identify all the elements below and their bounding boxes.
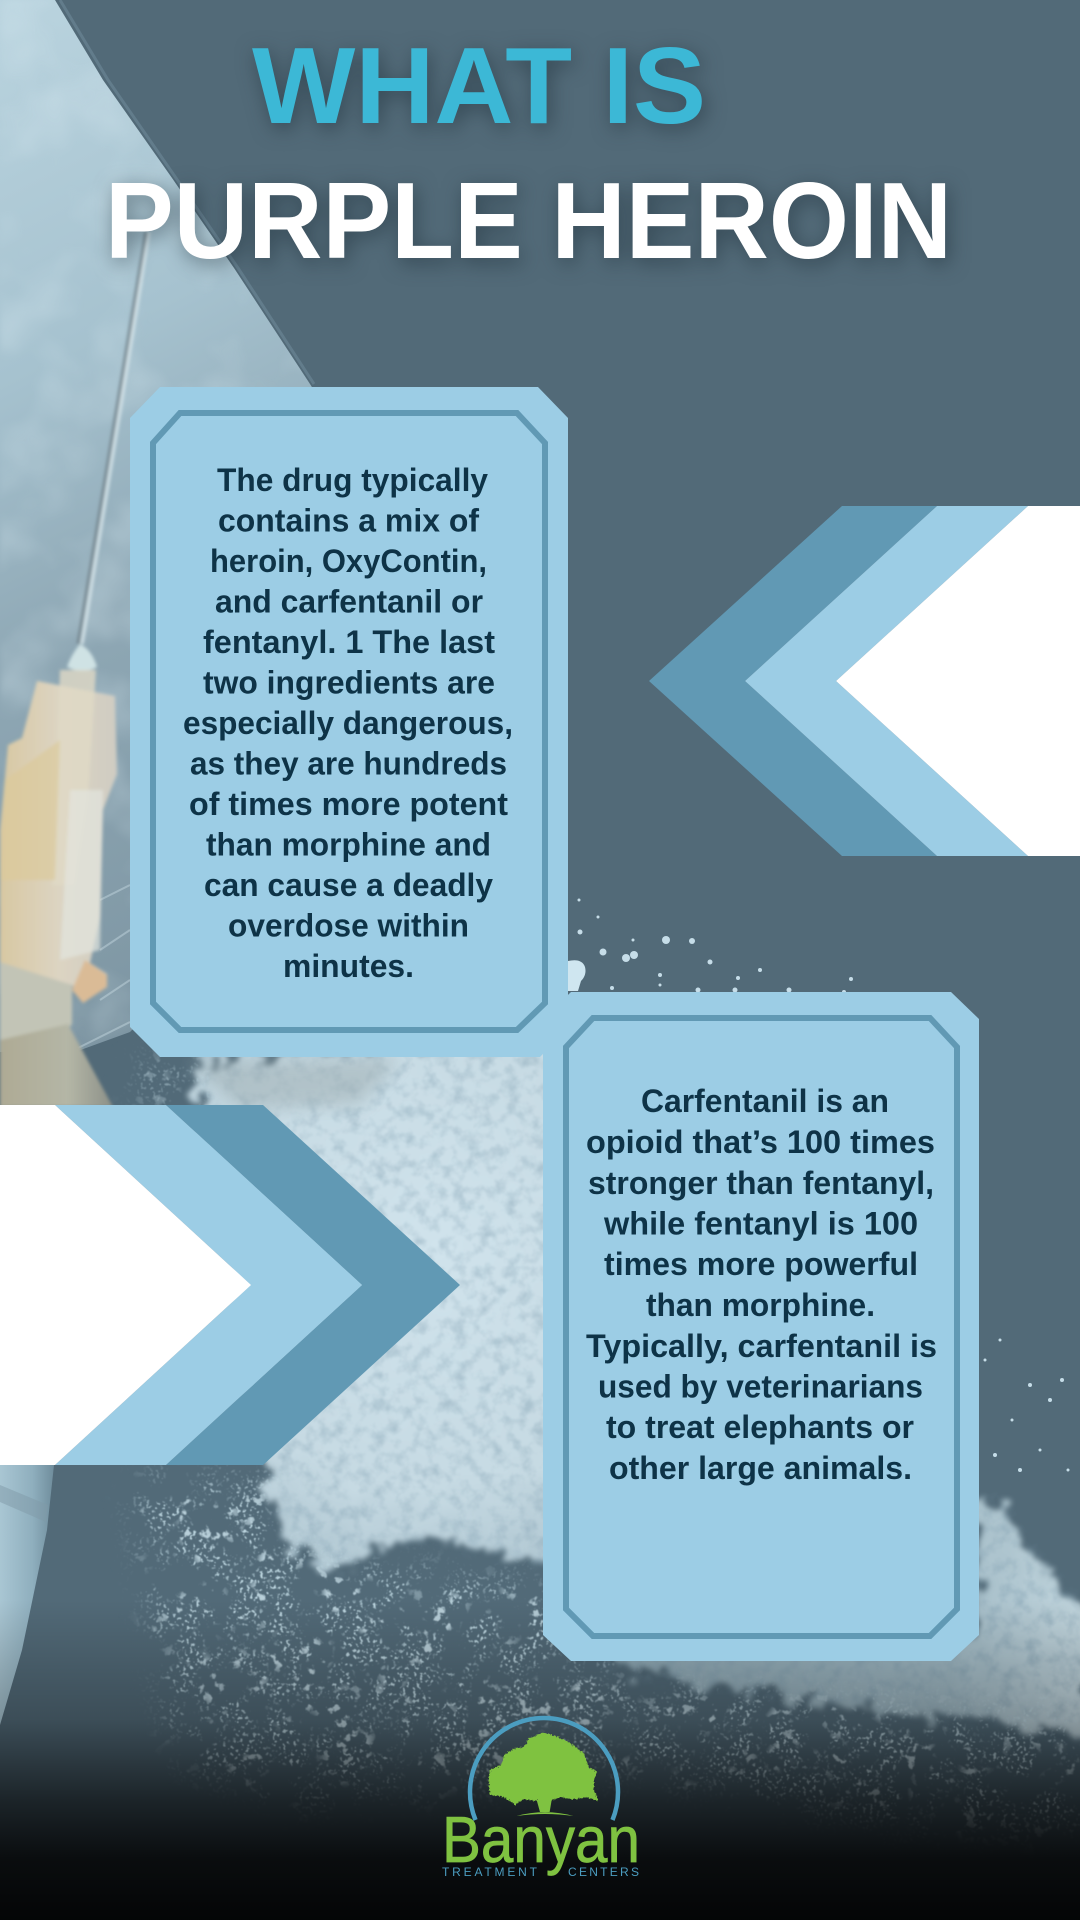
arrow: left chevron	[0, 1105, 460, 1465]
text block: drug contents: than morphine and	[206, 826, 491, 862]
background: plastic bag	[0, 0, 315, 1052]
logo wordmark: Banyan	[442, 1803, 640, 1876]
text block: drug contents: especially dangerous,	[183, 705, 513, 741]
syringe needle and hub	[0, 232, 149, 1107]
background: specks near top of pile	[568, 898, 1070, 1472]
background: right powder drift	[613, 1494, 1080, 1748]
logo: Banyan Treatment Centers	[442, 1718, 640, 1879]
text block: carfentanil facts: other large animals.	[609, 1450, 912, 1486]
text block: drug contents: two ingredients are	[203, 664, 495, 700]
text block: carfentanil facts: Carfentanil is an	[641, 1083, 889, 1119]
logo tagline right: CENTERS	[568, 1865, 639, 1879]
text block: drug contents: can cause a deadly	[204, 867, 493, 903]
text block: carfentanil facts: Typically, carfentanil is	[586, 1328, 937, 1364]
text block: drug contents	[183, 462, 513, 984]
logo tagline left: TREATMENT	[442, 1865, 538, 1879]
text block: drug contents: as they are hundreds	[190, 746, 507, 782]
icon: banyan tree	[489, 1733, 599, 1816]
title: PURPLE HEROIN	[105, 160, 952, 282]
panel: drug contents	[130, 387, 568, 1057]
title: WHAT IS	[252, 25, 706, 147]
text block: carfentanil facts	[586, 1083, 937, 1486]
text block: carfentanil facts: to treat elephants or	[606, 1409, 914, 1445]
text block: drug contents: heroin, OxyContin,	[210, 543, 487, 579]
text block: drug contents: overdose within	[228, 908, 469, 944]
syringe barrel lower	[0, 1465, 54, 1725]
icon: logo arc	[470, 1718, 618, 1820]
text block: drug contents: and carfentanil or	[215, 584, 483, 620]
background: scattered powder specks	[122, 1050, 1080, 1833]
text block: drug contents: minutes.	[283, 948, 414, 984]
panel: carfentanil facts	[543, 992, 979, 1661]
background: powder pile	[184, 1054, 543, 1576]
text block: carfentanil facts: than morphine.	[646, 1287, 875, 1323]
text block: carfentanil facts: while fentanyl is 100	[603, 1206, 918, 1242]
title	[105, 25, 952, 282]
text block: drug contents: contains a mix of	[218, 502, 479, 538]
text block: carfentanil facts: times more powerful	[604, 1246, 918, 1282]
text block: carfentanil facts: stronger than fentanyl,	[588, 1165, 934, 1201]
text block: drug contents: The drug typically	[217, 462, 488, 498]
text block: drug contents: fentanyl. 1 The last	[203, 624, 495, 660]
bottom dark gradient	[0, 1600, 1080, 1920]
text block: carfentanil facts: used by veterinarians	[598, 1368, 923, 1404]
arrow: right chevron	[649, 506, 1080, 856]
text block: drug contents: of times more potent	[189, 786, 508, 822]
text block: carfentanil facts: opioid that’s 100 times	[586, 1124, 935, 1160]
